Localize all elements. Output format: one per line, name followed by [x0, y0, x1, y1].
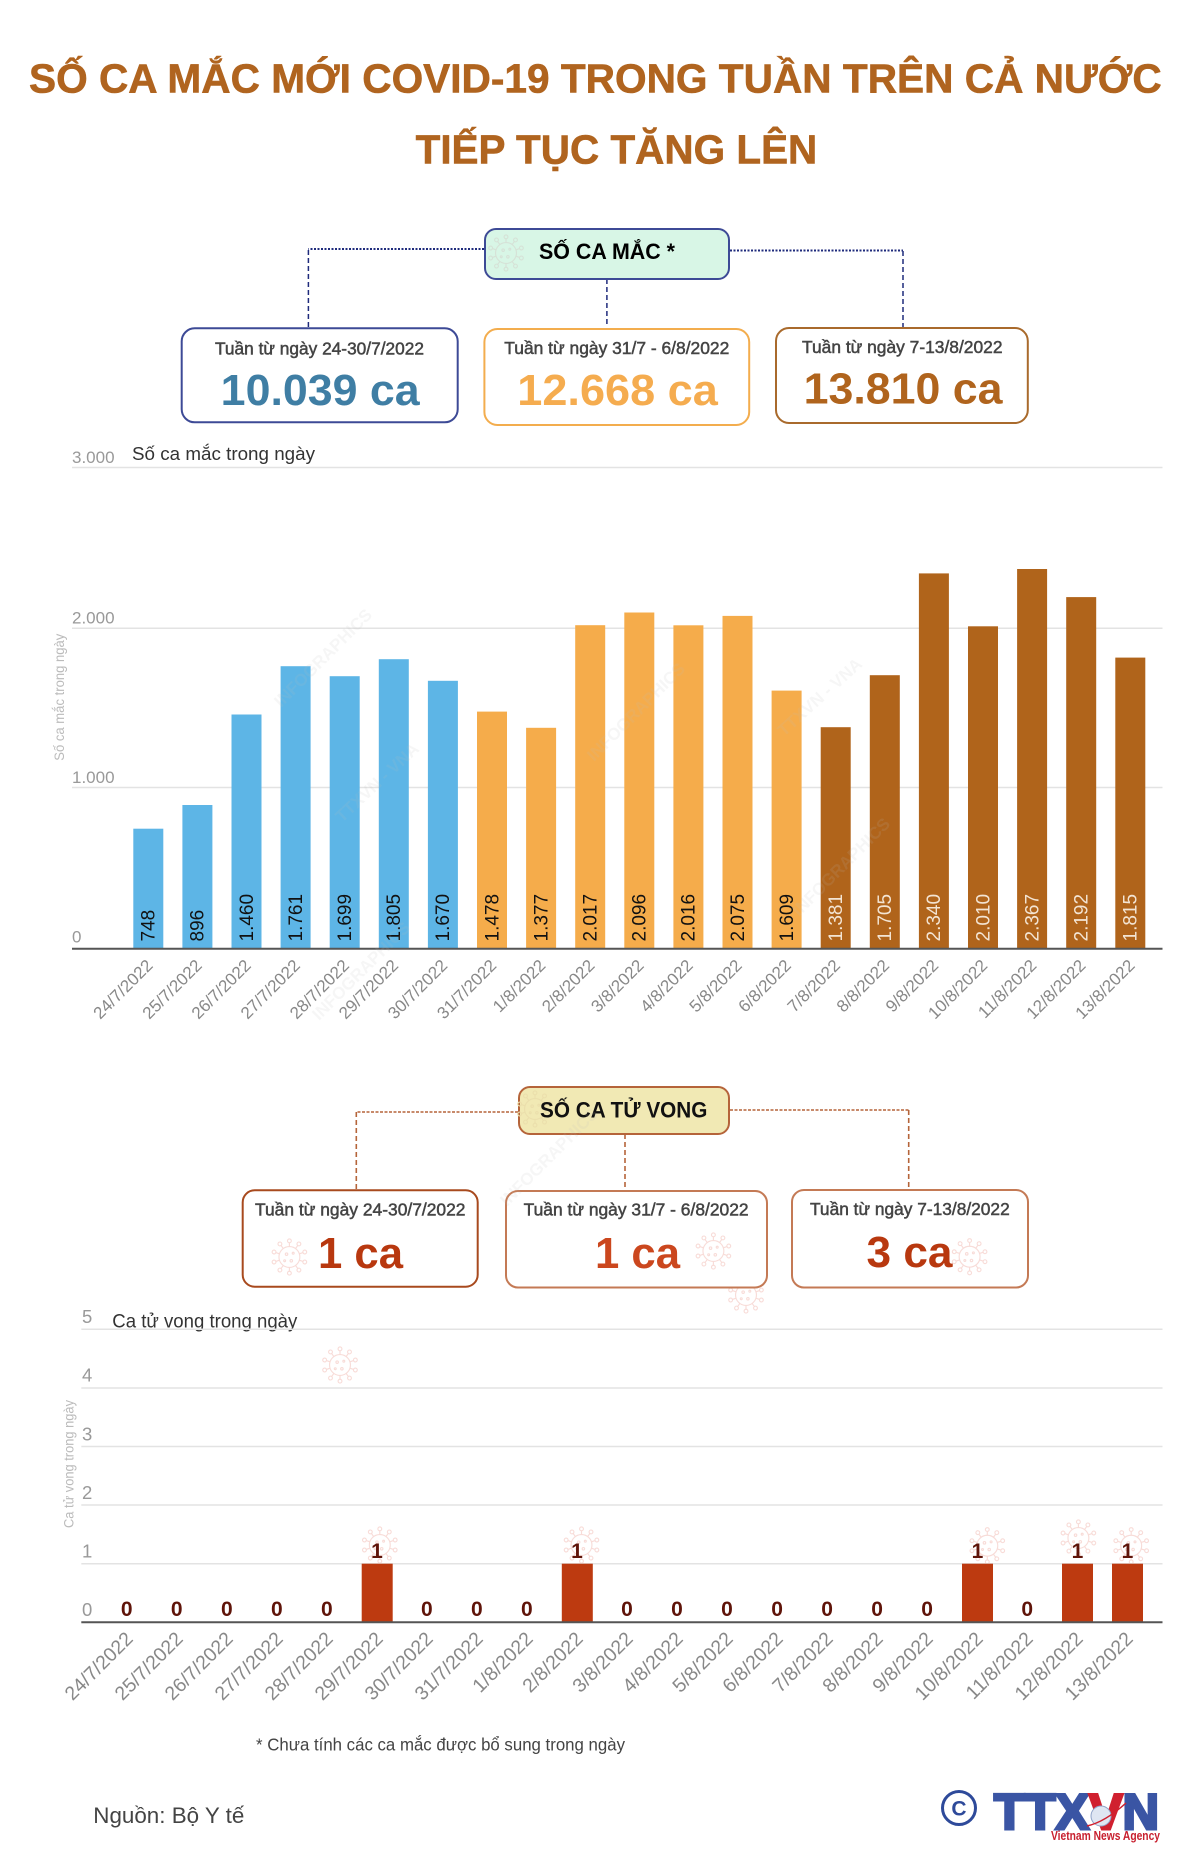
- bar value labels: 2.340: [924, 894, 945, 942]
- icon: virus: [272, 1239, 307, 1275]
- y axis title: Ca tử vong trong ngày: [62, 1400, 76, 1528]
- grid and y axis: [72, 448, 1162, 947]
- chart title: Số ca mắc trong ngày: [132, 443, 315, 464]
- x axis date labels: 27/7/2022: [211, 1628, 288, 1705]
- x axis date labels: 24/7/2022: [61, 1628, 138, 1705]
- bar value labels: 0: [471, 1598, 483, 1621]
- panel: week 2 deaths: 1 ca: [595, 1229, 681, 1278]
- x axis date labels: [90, 956, 1139, 1023]
- bars: week 3: [821, 569, 1145, 949]
- header: deaths: SỐ CA TỬ VONG: [540, 1096, 707, 1122]
- title: SỐ CA MẮC MỚI COVID-19 TRONG TUẦN TRÊN CẢ NƯỚC: [29, 56, 1162, 102]
- x axis date labels: 25/7/2022: [111, 1628, 188, 1705]
- x axis date labels: 30/7/2022: [361, 1628, 438, 1705]
- bar value labels: 2.367: [1022, 894, 1043, 942]
- header: deaths: [517, 1087, 729, 1134]
- grid and y axis: 0: [72, 928, 81, 947]
- watermarks: [270, 605, 894, 1210]
- grid and y axis: 1.000: [72, 768, 115, 787]
- watermarks: INFOGRAPHICS: [270, 605, 376, 711]
- bar value labels: 0: [221, 1598, 233, 1621]
- bar value labels: 2.017: [580, 894, 602, 942]
- x axis date labels: 31/7/2022: [433, 956, 500, 1023]
- bar value labels: 1.699: [335, 894, 356, 942]
- panel: week 1 deaths: [243, 1190, 478, 1287]
- grid and y axis: 0: [82, 1599, 92, 1620]
- bar value labels: 2.096: [630, 894, 651, 942]
- x axis date labels: 3/8/2022: [568, 1628, 638, 1697]
- grid and y axis: [81, 1306, 1162, 1620]
- bars: [362, 1564, 1143, 1622]
- bar value labels: 0: [121, 1598, 133, 1621]
- x axis date labels: 5/8/2022: [668, 1628, 738, 1697]
- panel: week 2 deaths: Tuần từ ngày 31/7 - 6/8/2022: [524, 1200, 749, 1220]
- bar value labels: 1.381: [826, 894, 847, 942]
- x axis date labels: 26/7/2022: [188, 956, 255, 1023]
- footnote: * Chưa tính các ca mắc được bổ sung trong ngày: [256, 1734, 625, 1755]
- x axis date labels: 2/8/2022: [518, 1628, 588, 1697]
- x axis date labels: 11/8/2022: [974, 956, 1040, 1022]
- bar value labels: 896: [188, 910, 209, 942]
- icon: virus: [696, 1233, 731, 1269]
- panel: week 1 cases: [182, 328, 458, 422]
- bar value labels: 0: [171, 1598, 183, 1621]
- icon: globe: [1087, 1803, 1126, 1826]
- bar chart: daily cases: [52, 443, 1162, 1023]
- bar value labels: 0: [521, 1598, 533, 1621]
- bar value labels: 0: [721, 1598, 733, 1621]
- panel: week 3 cases: [776, 328, 1028, 423]
- bar value labels: 0: [621, 1598, 633, 1621]
- x axis date labels: 28/7/2022: [261, 1628, 338, 1705]
- grid and y axis: 3: [82, 1423, 92, 1444]
- x axis date labels: 31/7/2022: [411, 1628, 488, 1705]
- x axis date labels: 5/8/2022: [686, 956, 746, 1016]
- x axis date labels: 29/7/2022: [335, 956, 402, 1023]
- panel: week 2 cases: [484, 329, 749, 425]
- x axis date labels: 10/8/2022: [911, 1628, 988, 1705]
- bar value labels: 0: [421, 1598, 433, 1621]
- icon: virus: [488, 235, 524, 271]
- connector lines: deaths: [356, 1110, 909, 1189]
- bar value labels: 1: [571, 1540, 583, 1563]
- panel: week 2 cases: 12.668 ca: [517, 366, 718, 415]
- connector lines: cases: [308, 249, 903, 327]
- y axis title: Số ca mắc trong ngày: [52, 633, 67, 761]
- bar value labels: 748: [139, 910, 160, 942]
- x axis date labels: 3/8/2022: [587, 956, 648, 1016]
- bar value labels: 0: [871, 1598, 883, 1621]
- x axis date labels: 7/8/2022: [768, 1628, 838, 1697]
- bar value labels: 0: [671, 1598, 683, 1621]
- icon: copyright: C: [951, 1798, 967, 1820]
- x axis date labels: 10/8/2022: [924, 956, 991, 1023]
- x axis date labels: 12/8/2022: [1023, 956, 1090, 1023]
- x axis date labels: 29/7/2022: [311, 1628, 388, 1705]
- bars: week 1: [133, 659, 458, 949]
- header: cases: SỐ CA MẮC *: [539, 238, 675, 264]
- grid and y axis: 2: [82, 1482, 92, 1503]
- logo: TTXVN: Vietnam News Agency: [1051, 1829, 1160, 1843]
- grid and y axis: 4: [82, 1365, 92, 1386]
- icon: virus behind week 2 panel: [728, 1277, 764, 1313]
- bar value labels: 1.377: [531, 894, 552, 942]
- title: [29, 56, 1162, 172]
- bar value labels: 0: [321, 1598, 333, 1621]
- watermarks: TTXVN - VNA: [774, 654, 866, 740]
- panel: week 3 deaths: Tuần từ ngày 7-13/8/2022: [810, 1199, 1010, 1219]
- panel: week 3 cases: 13.810 ca: [804, 365, 1003, 414]
- x axis date labels: 13/8/2022: [1072, 956, 1139, 1023]
- x axis date labels: 6/8/2022: [718, 1628, 788, 1697]
- x axis date labels: 2/8/2022: [538, 956, 599, 1016]
- bar value labels: 1.460: [237, 894, 258, 942]
- chart title: Ca tử vong trong ngày: [112, 1312, 298, 1332]
- watermarks: INFOGRAPHICS: [583, 659, 689, 765]
- x axis date labels: 4/8/2022: [636, 956, 697, 1016]
- bar value labels: 1: [1122, 1540, 1134, 1563]
- bar value labels: 1.705: [875, 894, 896, 942]
- panel: week 1 cases: Tuần từ ngày 24-30/7/2022: [215, 338, 424, 358]
- bar value labels: 0: [921, 1598, 933, 1621]
- x axis date labels: 1/8/2022: [489, 956, 549, 1016]
- bar value labels: 1.478: [482, 894, 503, 942]
- bar value labels: 1.609: [777, 894, 798, 942]
- x axis date labels: 8/8/2022: [818, 1628, 888, 1697]
- grid and y axis: 5: [82, 1306, 92, 1327]
- x axis date labels: 24/7/2022: [90, 956, 157, 1023]
- x axis date labels: 1/8/2022: [468, 1628, 538, 1697]
- watermarks: INFOGRAPHICS: [496, 1104, 602, 1210]
- x axis date labels: 9/8/2022: [868, 1628, 938, 1697]
- panel: week 1 cases: 10.039 ca: [221, 366, 420, 415]
- x axis date labels: 4/8/2022: [618, 1628, 688, 1697]
- bar value labels: 0: [821, 1598, 833, 1621]
- x axis date labels: 6/8/2022: [735, 956, 795, 1016]
- icon: virus: [517, 1091, 553, 1127]
- grid and y axis: 3.000: [72, 448, 115, 467]
- bar value labels: 2.192: [1072, 894, 1092, 942]
- decorative virus icons: [322, 1347, 1149, 1564]
- x axis date labels: 11/8/2022: [962, 1628, 1038, 1704]
- panel: week 3 deaths: 3 ca: [866, 1228, 953, 1277]
- x axis date labels: 28/7/2022: [286, 956, 353, 1023]
- bar value labels: [139, 894, 1142, 942]
- bar value labels: 1: [972, 1540, 984, 1563]
- watermarks: INFOGRAPHICS: [308, 918, 414, 1024]
- logo: TTXVN: TTXVN: [994, 1784, 1159, 1840]
- bar value labels: 1: [1072, 1540, 1084, 1563]
- bar value labels: 1.761: [286, 894, 307, 942]
- panel: week 2 deaths: [506, 1191, 767, 1288]
- panel: week 2 cases: Tuần từ ngày 31/7 - 6/8/2022: [504, 338, 729, 358]
- x axis line: [72, 948, 1162, 950]
- bar value labels: 1: [371, 1540, 383, 1563]
- x axis date labels: 25/7/2022: [139, 956, 206, 1023]
- x axis date labels: 7/8/2022: [784, 956, 844, 1016]
- x axis date labels: 27/7/2022: [237, 956, 304, 1023]
- watermarks: TTXVN - VNA: [332, 739, 423, 826]
- x axis date labels: 30/7/2022: [384, 956, 451, 1023]
- x axis date labels: 13/8/2022: [1061, 1628, 1138, 1705]
- bar value labels: 2.075: [728, 894, 749, 942]
- x axis line: [81, 1621, 1162, 1623]
- bar value labels: 2.016: [679, 894, 700, 942]
- icon: copyright: [942, 1792, 976, 1824]
- bar value labels: 1.815: [1121, 894, 1142, 942]
- header: cases: [485, 229, 729, 279]
- grid and y axis: 2.000: [72, 609, 115, 628]
- panel: week 3 deaths: [792, 1190, 1028, 1288]
- bar value labels: 0: [771, 1598, 783, 1621]
- bar chart: daily deaths: [61, 1306, 1163, 1705]
- source: Nguồn: Bộ Y tế: [93, 1803, 244, 1828]
- bars: week 2: [477, 612, 802, 949]
- x axis date labels: 8/8/2022: [833, 956, 893, 1016]
- panel: week 3 cases: Tuần từ ngày 7-13/8/2022: [802, 337, 1002, 357]
- bar value labels: 0: [1021, 1598, 1033, 1621]
- panel: week 1 deaths: Tuần từ ngày 24-30/7/2022: [255, 1200, 466, 1220]
- x axis date labels: 12/8/2022: [1011, 1628, 1088, 1705]
- bar value labels: 1.805: [384, 894, 405, 942]
- x axis date labels: [61, 1628, 1138, 1705]
- icon: virus: [952, 1239, 987, 1275]
- x axis date labels: 9/8/2022: [882, 956, 942, 1016]
- bar value labels: 2.010: [973, 894, 994, 942]
- title: TIẾP TỤC TĂNG LÊN: [416, 126, 817, 172]
- panel: week 1 deaths: 1 ca: [318, 1229, 404, 1278]
- bar value labels: 1.670: [433, 894, 454, 942]
- watermarks: INFOGRAPHICS: [788, 814, 894, 920]
- bar value labels: 0: [271, 1598, 283, 1621]
- grid and y axis: 1: [82, 1540, 92, 1562]
- x axis date labels: 26/7/2022: [161, 1628, 238, 1705]
- bar value labels: [121, 1540, 1134, 1621]
